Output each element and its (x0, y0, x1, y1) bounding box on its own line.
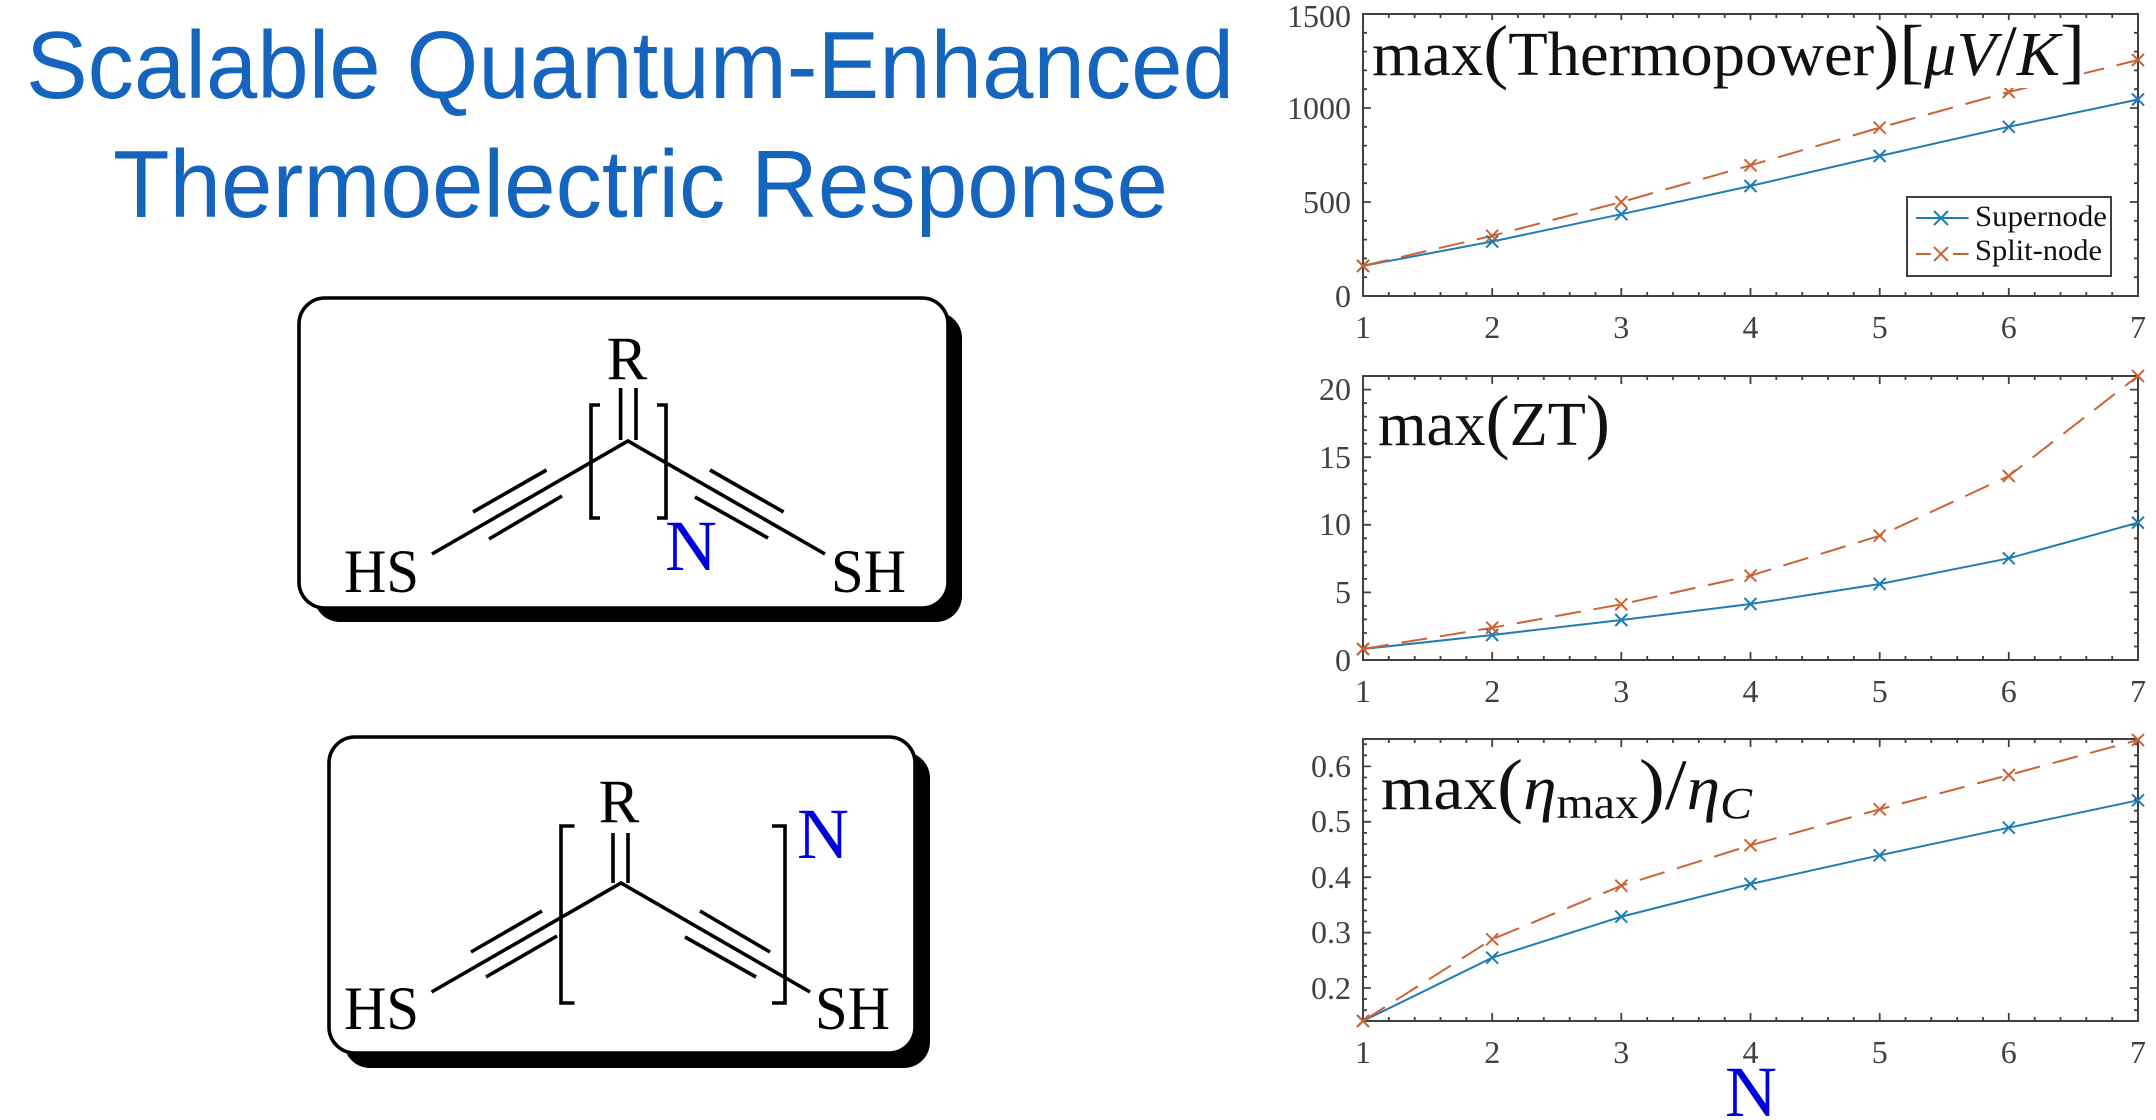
chart: max efficiency: max(η (1381, 745, 1554, 825)
chart: max ZT: 2 (1484, 673, 1500, 709)
panel: split-node molecule: SH (815, 976, 890, 1043)
chart: max efficiency: 2 (1484, 1034, 1500, 1070)
chart: max efficiency: )/ (1639, 745, 1687, 825)
chart: max thermopower: 2 (1484, 309, 1500, 345)
chart: max efficiency: 0.5 (1311, 803, 1351, 839)
chart: max ZT: 6 (2001, 673, 2017, 709)
legend: Split-node (1975, 234, 2102, 267)
chart: max efficiency: η (1687, 755, 1720, 823)
chart: max ZT: 4 (1742, 673, 1758, 709)
chart: max thermopower: 0 (1335, 278, 1351, 314)
panel: supernode molecule (299, 298, 962, 622)
chart: max ZT: 7 (2130, 673, 2146, 709)
chart: max thermopower: 1 (1355, 309, 1371, 345)
chart: max efficiency: 3 (1613, 1034, 1629, 1070)
chart: max thermopower: max(Thermopower)[μV/K] (1372, 11, 2085, 91)
panel: split-node molecule: HS (344, 976, 419, 1043)
chart: max thermopower (1287, 0, 2146, 345)
chart: max ZT: 15 (1319, 439, 1351, 475)
chart: max ZT: 3 (1613, 673, 1629, 709)
chart: max efficiency: 5 (1872, 1034, 1888, 1070)
chart: max efficiency: 7 (2130, 1034, 2146, 1070)
chart: max ZT: 10 (1319, 506, 1351, 542)
chart: max ZT (1319, 370, 2146, 709)
title: Scalable Quantum-Enhanced (26, 12, 1234, 119)
panel: supernode molecule: SH (831, 539, 906, 606)
chart: max thermopower: 4 (1742, 309, 1758, 345)
chart: max efficiency: 0.3 (1311, 914, 1351, 950)
panel: supernode molecule: N (665, 506, 717, 586)
chart: max ZT: 5 (1335, 574, 1351, 610)
chart: max ZT: 5 (1872, 673, 1888, 709)
chart: max ZT: 20 (1319, 371, 1351, 407)
panel: supernode molecule: HS (344, 539, 419, 606)
chart: max efficiency: 0.4 (1311, 859, 1351, 895)
chart: max efficiency: 1 (1355, 1034, 1371, 1070)
chart: max thermopower: 3 (1613, 309, 1629, 345)
chart: max efficiency: 6 (2001, 1034, 2017, 1070)
panel: supernode molecule: R (607, 326, 648, 393)
chart: max ZT: max(ZT) (1378, 381, 1610, 461)
panel: split-node molecule: N (797, 794, 849, 874)
title: Thermoelectric Response (113, 131, 1168, 238)
chart: max thermopower: 1000 (1287, 90, 1351, 126)
panel: split-node molecule: R (599, 769, 640, 836)
chart: max efficiency: 0.2 (1311, 970, 1351, 1006)
chart: max efficiency: C (1720, 779, 1753, 828)
chart: max thermopower: 5 (1872, 309, 1888, 345)
chart: max thermopower: 7 (2130, 309, 2146, 345)
title (26, 12, 1234, 238)
chart: max ZT: 1 (1355, 673, 1371, 709)
chart: max efficiency (1311, 734, 2146, 1070)
chart: max efficiency: 0.6 (1311, 748, 1351, 784)
chart: max efficiency: max (1557, 779, 1639, 828)
chart: max thermopower: 6 (2001, 309, 2017, 345)
chart: max ZT: 0 (1335, 642, 1351, 678)
chart: max thermopower: 500 (1303, 184, 1351, 220)
panel: split-node molecule (329, 737, 930, 1068)
chart: max efficiency: 4 (1742, 1034, 1758, 1070)
legend: Supernode (1975, 200, 2107, 233)
legend (1907, 197, 2111, 276)
